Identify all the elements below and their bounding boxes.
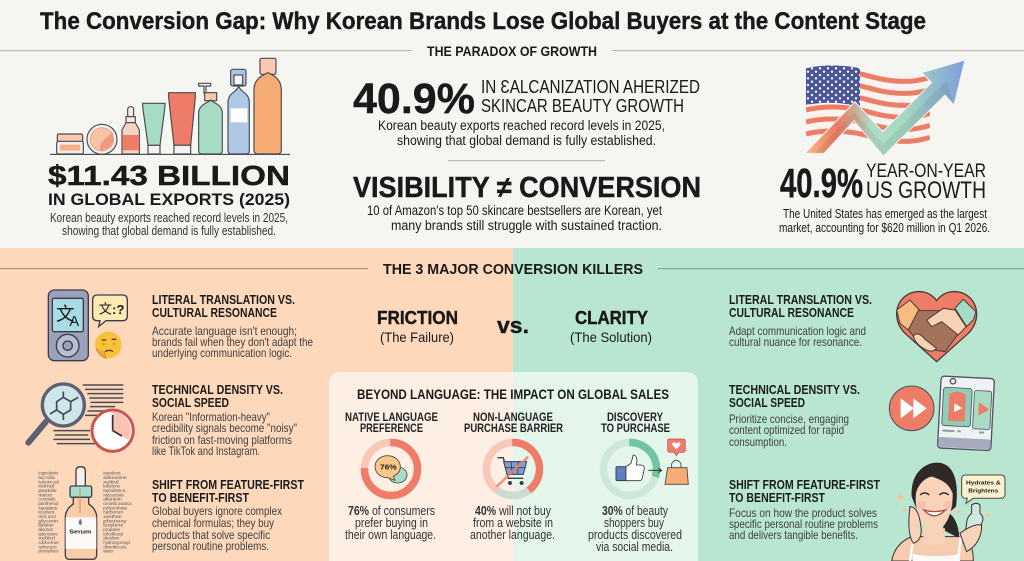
icon: serum bottle with ingredient lists: ceramide (38, 497, 56, 502)
stat: purchase barrier: 40% will not buy (475, 504, 552, 518)
panel: global exports (48, 58, 290, 238)
stat: discovery to purchase: shoppers buy (604, 516, 665, 530)
text block: feature first: Global buyers ignore complex (152, 504, 282, 518)
stat: native language preference: 76% of consumers (348, 504, 435, 518)
stat: 40.9 percent US: 40.9% (780, 160, 863, 206)
text block: social speed: TECHNICAL DENSITY VS. (729, 383, 860, 397)
icon: serum bottle with ingredient lists: Ingredients (103, 471, 121, 476)
icon: serum bottle with ingredient lists: glycerin (38, 518, 59, 523)
text block: technical density: Korean "Information-heavy" (152, 410, 270, 424)
icon: serum bottle with ingredient lists: lauryl sulfate (38, 475, 55, 480)
stat: discovery to purchase: TO PURCHASE (601, 423, 670, 435)
icon: thumbs up to shopping bag (616, 439, 688, 484)
panel: beyond language impact (329, 372, 698, 561)
stat: discovery to purchase: products discovered (588, 528, 682, 542)
icon: serum bottle with ingredient lists: polysorbate (103, 505, 128, 510)
text block: benefit first: Focus on how the product solves (729, 506, 877, 520)
text block: benefit first: and delivers tangible benefits. (729, 528, 858, 542)
heading: beyond language: BEYOND LANGUAGE: THE IMPACT ON GLOBAL SALES (357, 387, 669, 402)
stat: native language preference: PREFERENCE (360, 423, 423, 435)
stat label: US growth: US GROWTH (866, 177, 986, 204)
icon: magnifier with molecule and clock (28, 384, 133, 451)
stat label: beauty growth (481, 77, 700, 116)
icon: serum bottle with ingredient lists: tocopherol (38, 510, 54, 515)
text block: technical density: credibility signals become "noisy" (152, 421, 297, 435)
icon: serum bottle with ingredient lists: dimethicone (103, 544, 127, 549)
stat: native language preference: NATIVE LANGUAGE (345, 412, 438, 424)
text block: cultural resonance: Adapt communication logic and (729, 324, 866, 338)
text block: exports description: Korean beauty exports reached record levels in 2025, (50, 211, 288, 225)
text block: exports description (50, 211, 288, 238)
icon: serum bottle with ingredient lists: xylitol (103, 479, 119, 484)
stat: purchase barrier: from a website in (473, 516, 553, 530)
text block: feature first: TO BENEFIT-FIRST (152, 491, 249, 505)
text block: cultural resonance (729, 293, 872, 349)
text block: technical density: TECHNICAL DENSITY VS. (152, 383, 283, 397)
stat: purchase barrier: NON-LANGUAGE (473, 412, 553, 424)
icon: phone translation: :? (112, 302, 125, 317)
text block: literal translation: Accurate language isn't enough; (152, 324, 297, 338)
text block: amazon bestsellers (367, 203, 662, 233)
panel: US growth (779, 60, 990, 235)
title: The Conversion Gap: Why Korean Brands Lose Global Buyers at the Content Stage (40, 8, 926, 35)
icon: row of cosmetic bottles (50, 58, 290, 155)
panel: center stats (353, 75, 701, 233)
heading: clarity (570, 308, 652, 345)
icon: serum bottle with ingredient lists (38, 467, 132, 559)
icon: serum bottle with ingredient lists: water (103, 549, 114, 554)
text block: social speed: content optimized for rapid (729, 423, 844, 437)
icon: serum bottle with ingredient lists: xylitol (38, 536, 55, 541)
text block: social speed: Prioritize concise, engaging (729, 412, 849, 426)
icon: serum bottle with ingredient lists: hyaluronic acid (38, 479, 59, 484)
text block: benefit first: TO BENEFIT-FIRST (729, 491, 825, 505)
text block: technical density: friction on fast-moving platforms (152, 433, 292, 447)
text block: feature first: chemical formulas; they buy (152, 516, 274, 530)
icon: serum bottle with ingredient lists: Ingredients & (103, 488, 125, 493)
text block: US market description (779, 207, 990, 235)
text block: technical density: like TikTok and Instagram. (152, 444, 260, 458)
stat: purchase barrier (464, 412, 564, 542)
icon: serum bottle with ingredient lists: Ingredients (38, 471, 58, 476)
text block: growth description: showing that global demand is fully established. (397, 133, 656, 148)
panel: friction background (0, 248, 513, 561)
text block: social speed: consumption. (729, 435, 787, 449)
icon: serum bottle with ingredient lists: butylene (103, 523, 124, 528)
icon: serum bottle with ingredient lists: xanthan gum (38, 544, 57, 549)
text block: cultural resonance: LITERAL TRANSLATION VS. (729, 293, 872, 307)
icon: serum bottle with ingredient lists: carbomer (38, 540, 60, 545)
icon: serum bottle with ingredient lists: citric acid (38, 514, 56, 519)
icon: shopping cart crossed out (497, 457, 528, 487)
text block: growth description (378, 118, 665, 148)
section heading: paradox of growth: THE PARADOX OF GROWTH (427, 43, 597, 59)
icon: serum bottle with ingredient lists: Serum (69, 529, 92, 535)
icon: serum bottle with ingredient lists: squalane (38, 505, 58, 510)
stat: purchase barrier: another language. (470, 528, 555, 542)
icon: speech bubbles: 76% (380, 463, 397, 472)
icon: serum bottle with ingredient lists: retinol (38, 484, 54, 489)
text block: growth description: Korean beauty exports reached record levels in 2025, (378, 118, 665, 133)
text block: feature first: SHIFT FROM FEATURE-FIRST (152, 478, 304, 492)
icon: phone translation: 文 (99, 301, 112, 316)
icon: fast forward and social feed (889, 376, 994, 451)
stat: 40.9 percent: 40.9% (353, 75, 475, 123)
icon: serum bottle with ingredient lists: propane (103, 527, 121, 532)
text block: amazon bestsellers: many brands still struggle with sustained traction. (391, 218, 662, 233)
text block: cultural resonance: CULTURAL RESONANCE (729, 306, 854, 320)
stat: discovery to purchase: DISCOVERY (607, 412, 663, 424)
heading: friction (377, 308, 458, 345)
text block: cultural resonance: cultural nuance for resonance. (729, 335, 862, 349)
text block: benefit first: specific personal routine problems (729, 517, 878, 531)
heading: visibility not conversion: VISIBILITY ≠ CONVERSION (353, 172, 701, 204)
icon: serum bottle with ingredient lists: allantoin (103, 497, 122, 502)
icon: phone translation: A (69, 314, 79, 330)
text block: exports description: showing that global demand is fully established. (62, 224, 276, 238)
label: versus: vs. (497, 313, 529, 338)
panel: clarity background (513, 248, 1024, 561)
text block: literal translation: LITERAL TRANSLATION VS. (152, 293, 295, 307)
text block: feature first: products that solve specific (152, 528, 270, 542)
icon: serum bottle with ingredient lists: peptide (38, 488, 57, 493)
icon: serum bottle with ingredient lists: disodium (103, 536, 120, 541)
stat: discovery to purchase: 30% of beauty (602, 504, 669, 518)
heading: friction: (The Failure) (380, 329, 454, 345)
text block: technical density (152, 383, 297, 458)
icon: serum bottle with ingredient lists: xanthan (103, 514, 122, 519)
stat label: year on year: YEAR-ON-YEAR (866, 161, 986, 182)
icon: smiling woman with serum (892, 463, 1005, 561)
stat: native language preference (345, 412, 438, 542)
stat label: global exports: IN GLOBAL EXPORTS (2025) (48, 190, 290, 209)
heading: clarity: CLARITY (575, 308, 648, 328)
text block: literal translation: CULTURAL RESONANCE (152, 306, 277, 320)
icon: phone translation (48, 290, 127, 361)
icon: phone translation: 文 (56, 304, 75, 325)
panel: clarity rows (729, 292, 1005, 561)
heading: friction: FRICTION (377, 308, 458, 328)
icon: serum bottle with ingredient lists: centella asiatica (103, 501, 132, 506)
icon: serum bottle with ingredient lists: ethylhexyl (103, 531, 123, 536)
stat label: beauty growth: IN ƐALCANIZATION AHERIZED (481, 77, 700, 97)
icon: serum bottle with ingredient lists: phenoxyethanol (38, 549, 58, 554)
text block: benefit first (729, 478, 880, 542)
icon: serum bottle with ingredient lists: adenosine (38, 531, 58, 536)
icon: serum bottle with ingredient lists: panthenol (38, 501, 58, 506)
icon: serum bottle with ingredient lists: phenoxy (103, 518, 128, 523)
text block: social speed (729, 383, 860, 449)
icon: serum bottle with ingredient lists: allantoin (38, 527, 54, 532)
icon: heart with handshake (897, 292, 977, 362)
icon: US flag with rising arrow (803, 60, 965, 156)
stat: discovery to purchase: via social media. (596, 540, 673, 554)
icon: smiling woman with serum: Hydrates & (966, 480, 1001, 486)
stat: native language preference: prefer buying in (355, 516, 428, 530)
text block: literal translation: underlying communication logic. (152, 346, 292, 360)
text block: benefit first: SHIFT FROM FEATURE-FIRST (729, 478, 880, 492)
icon: serum bottle with ingredient lists: butylene (103, 484, 121, 489)
text block: literal translation: brands fail when they don't adapt the (152, 335, 313, 349)
stat: 11.43 billion: $11.43 BILLION (48, 160, 290, 191)
icon: serum bottle with ingredient lists: madecassoside (103, 492, 124, 497)
stat: purchase barrier: PURCHASE BARRIER (464, 423, 564, 435)
text block: feature first (152, 478, 304, 553)
icon: serum bottle with ingredient lists: niacin (38, 492, 53, 497)
stat: discovery to purchase (588, 412, 688, 554)
text block: amazon bestsellers: 10 of Amazon's top 50 skincare bestsellers are Korean, yet (367, 203, 662, 218)
text block: feature first: personal routine problems. (152, 539, 269, 553)
stat label: beauty growth: SKINCAR BEAUTY GROWTH (481, 96, 684, 116)
stat: native language preference: their own language. (345, 528, 436, 542)
icon: serum bottle with ingredient lists: hydroxypropyl (103, 540, 130, 545)
heading: clarity: (The Solution) (570, 329, 652, 345)
text block: literal translation (152, 293, 313, 360)
section heading: conversion killers: THE 3 MAJOR CONVERSION KILLERS (383, 262, 643, 278)
icon: serum bottle with ingredient lists: adenosine (103, 475, 127, 480)
text block: social speed: SOCIAL SPEED (729, 396, 805, 410)
icon: smiling woman with serum: Brightens (968, 488, 998, 494)
icon: serum bottle with ingredient lists: carbomer (103, 510, 124, 515)
icon: serum bottle with ingredient lists: betaine (38, 523, 54, 528)
text block: technical density: SOCIAL SPEED (152, 396, 229, 410)
panel: friction rows (28, 290, 313, 559)
